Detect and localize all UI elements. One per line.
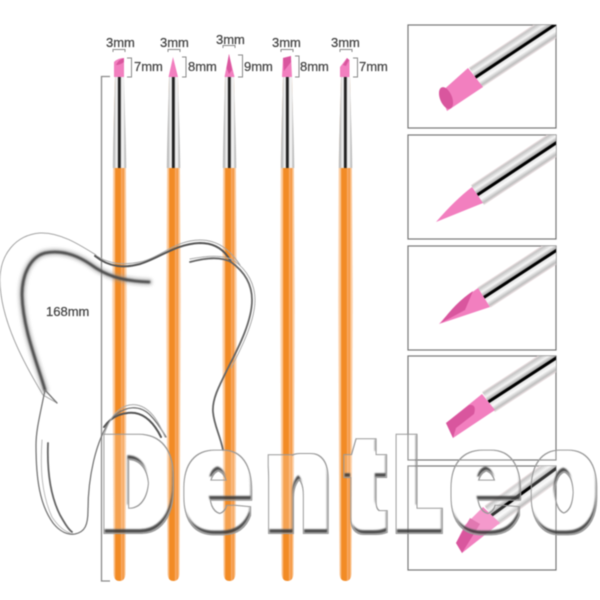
panel: detail tip 1 bbox=[406, 24, 558, 130]
logo watermark: DentLeo: e bbox=[450, 402, 521, 560]
logo watermark: DentLeo: n bbox=[267, 413, 329, 556]
label: brush 1 tip length: 7mm bbox=[134, 59, 163, 74]
label: brush 3 width: 3mm bbox=[216, 32, 245, 47]
panel: detail tip 3 bbox=[406, 244, 558, 352]
logo watermark: DentLeo: L bbox=[397, 413, 439, 556]
panel: detail tip 4 bbox=[406, 354, 558, 462]
label: brush 2 width: 3mm bbox=[160, 35, 189, 50]
brush 5 bbox=[338, 58, 353, 581]
brush 1 bbox=[112, 58, 127, 581]
label: overall length: 168mm bbox=[46, 304, 89, 319]
label: brush 4 width: 3mm bbox=[272, 35, 301, 50]
label: brush 1 width: 3mm bbox=[106, 35, 135, 50]
label: brush 3 tip length: 9mm bbox=[244, 59, 273, 74]
tooth outline bbox=[0, 233, 255, 534]
width and length labels bbox=[46, 32, 388, 319]
label: brush 5 tip length: 7mm bbox=[359, 59, 388, 74]
brush 2 bbox=[166, 57, 181, 581]
logo watermark: DentLeo: D bbox=[103, 413, 172, 556]
dimension brackets bbox=[113, 46, 358, 77]
label: brush 5 width: 3mm bbox=[331, 35, 360, 50]
length bracket: 168mm bbox=[102, 76, 110, 581]
panel: detail tip 5 bbox=[406, 464, 558, 572]
logo watermark: DentLeo: e bbox=[183, 402, 252, 560]
logo watermark: DentLeo: t bbox=[348, 413, 383, 556]
panel: detail tip 2 bbox=[406, 134, 558, 240]
brush 4 bbox=[280, 56, 295, 581]
brush 3 bbox=[222, 54, 237, 581]
label: brush 4 tip length: 8mm bbox=[300, 59, 329, 74]
label: brush 2 tip length: 8mm bbox=[188, 59, 217, 74]
logo watermark: DentLeo bbox=[103, 402, 597, 560]
